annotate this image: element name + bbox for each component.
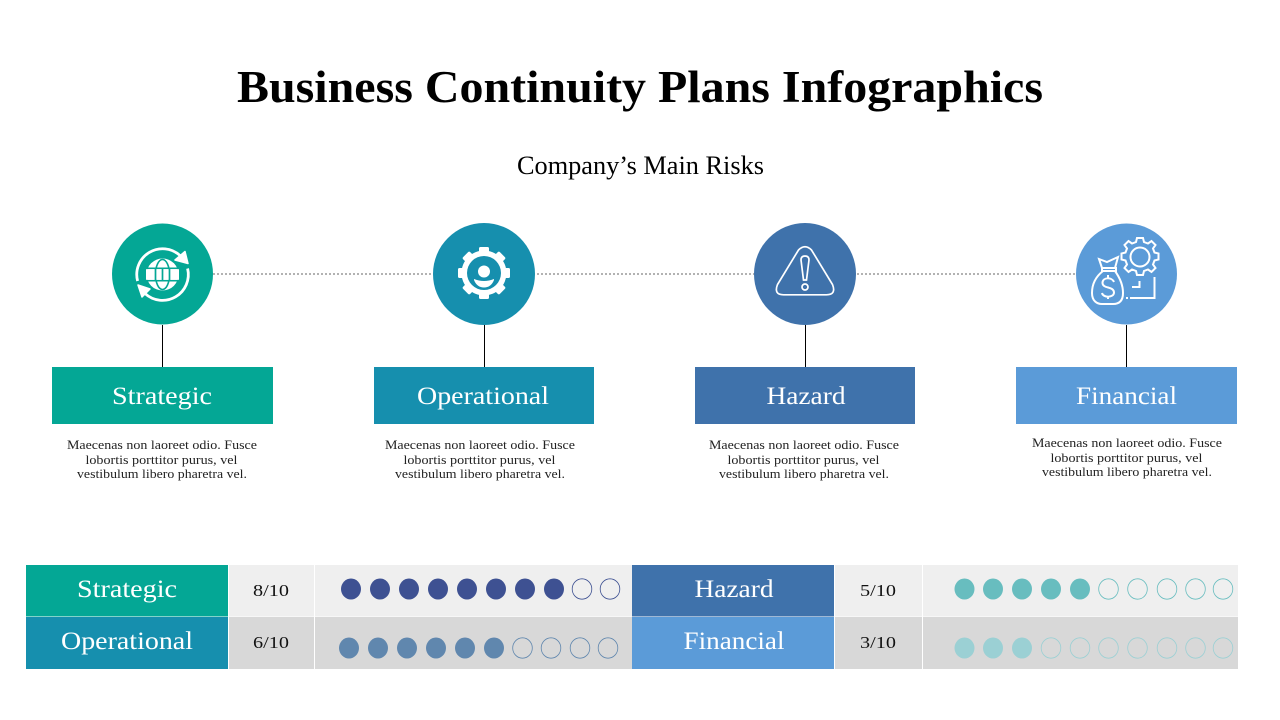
description: strategic: vestibulum libero pharetra vel.	[77, 467, 247, 481]
description: operational: Maecenas non laoreet odio. Fusce	[385, 438, 575, 452]
description: financial: Maecenas non laoreet odio. Fusce	[1032, 436, 1222, 450]
panel: strategic	[52, 224, 273, 481]
description: hazard: Maecenas non laoreet odio. Fusce	[709, 438, 899, 452]
row: hazard: Hazard	[694, 576, 774, 603]
description: financial: lobortis porttitor purus, vel	[1050, 451, 1203, 465]
row: strategic: Strategic	[77, 576, 177, 603]
row: hazard: 5/10	[860, 581, 896, 600]
row: financial: Financial	[684, 628, 785, 655]
description: financial: vestibulum libero pharetra vel.	[1042, 465, 1212, 479]
panel: financial	[1016, 224, 1237, 479]
label box: financial: Financial	[1076, 383, 1177, 410]
rating table	[26, 565, 1238, 669]
icon: warning triangle	[776, 247, 834, 295]
row: strategic	[26, 565, 620, 616]
description: hazard: lobortis porttitor purus, vel	[727, 453, 880, 467]
description: strategic: Maecenas non laoreet odio. Fusce	[67, 438, 257, 452]
row: financial	[632, 617, 1233, 669]
row: strategic: 8/10	[253, 581, 289, 600]
row: financial: 3/10	[860, 633, 896, 652]
label box: hazard	[695, 367, 915, 424]
title: Business Continuity Plans Infographics	[237, 62, 1043, 112]
label box: hazard: Hazard	[766, 383, 846, 410]
description: strategic: lobortis porttitor purus, vel	[85, 453, 238, 467]
label box: strategic	[52, 367, 273, 424]
label box: strategic: Strategic	[112, 383, 212, 410]
label box: operational: Operational	[417, 383, 549, 410]
row: operational: 6/10	[253, 633, 289, 652]
panel: hazard	[695, 223, 915, 481]
row: hazard	[632, 565, 1233, 616]
panel: operational	[374, 223, 594, 481]
label box: financial	[1016, 367, 1237, 424]
subtitle: Company’s Main Risks	[517, 151, 764, 180]
description: operational: vestibulum libero pharetra vel.	[395, 467, 565, 481]
row: operational: Operational	[61, 628, 193, 655]
icon: money bag and gear	[1092, 238, 1158, 304]
label box: operational	[374, 367, 594, 424]
row: operational	[26, 617, 618, 669]
description: hazard: vestibulum libero pharetra vel.	[719, 467, 889, 481]
icon: gear with person	[458, 247, 510, 299]
icon: globe with refresh arrows	[137, 249, 188, 300]
description: operational: lobortis porttitor purus, vel	[403, 453, 556, 467]
